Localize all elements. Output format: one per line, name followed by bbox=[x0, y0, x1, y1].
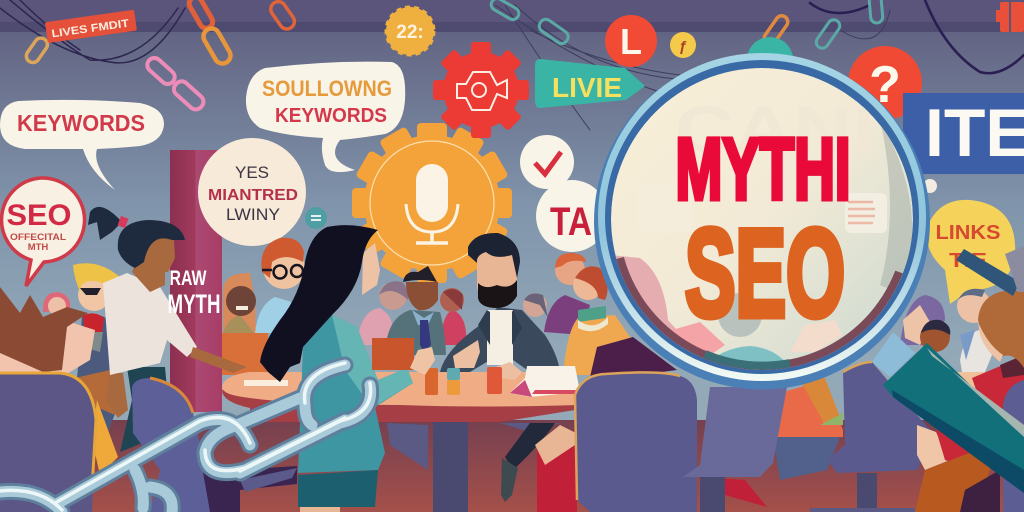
person: man in blue suit bbox=[385, 266, 446, 355]
person: woman with brown hair foreground bbox=[0, 287, 95, 378]
magnifying glass bbox=[594, 53, 1024, 493]
bubble: TA bbox=[536, 180, 608, 252]
table with pedestal bbox=[222, 372, 578, 512]
small red tag top right bbox=[996, 2, 1024, 32]
grey box top right bbox=[1005, 246, 1024, 292]
bubble: yes maintained: YES bbox=[235, 163, 269, 182]
bubble: yes maintained bbox=[198, 138, 306, 246]
speech bubble: SEO official myth: MTH bbox=[28, 242, 48, 253]
table items: cups and notebook bbox=[244, 366, 580, 397]
person: woman with long black hair bbox=[260, 225, 435, 512]
lens title: MYTHI: MYTHI bbox=[676, 121, 850, 218]
lens handle accessory bbox=[956, 249, 1020, 296]
speech bubble: swallowing keywords: SOULLOWNG bbox=[262, 76, 392, 101]
badge: 22 gear bbox=[386, 7, 434, 55]
far table and right side crowd bbox=[773, 289, 1024, 480]
bubble: links: TIE bbox=[949, 250, 987, 272]
badge: L: L bbox=[620, 21, 642, 62]
bubble: yes maintained: MIANTRED bbox=[208, 187, 298, 204]
tag: lives find it: LIVES FMDIT bbox=[51, 18, 130, 40]
small sticker bbox=[923, 179, 937, 193]
bubble: TA: TA bbox=[550, 200, 592, 244]
bubble: links: LINKS bbox=[936, 222, 1000, 244]
person: woman in ponytail bbox=[88, 207, 247, 452]
speech bubble: swallowing keywords bbox=[246, 62, 405, 172]
badge: question mark: ? bbox=[869, 56, 901, 114]
person: man with beard bbox=[440, 233, 560, 502]
red pillar bbox=[170, 150, 222, 412]
bubble: links bbox=[927, 200, 1015, 304]
speech bubble: keywords bbox=[0, 100, 164, 190]
badge: L bbox=[605, 15, 657, 67]
label: raw myth bbox=[168, 267, 220, 319]
bubble: check mark bbox=[520, 135, 574, 189]
speech bubble: SEO official myth: SEO bbox=[6, 199, 72, 232]
label: raw myth: MYTH bbox=[168, 289, 220, 319]
badge: question mark bbox=[848, 46, 922, 120]
silver chain bbox=[0, 363, 371, 512]
badge: small yellow: ƒ bbox=[679, 38, 687, 55]
tag: live bbox=[535, 59, 645, 108]
lens content: CANI bbox=[675, 92, 875, 166]
lens title: SEO: SEO bbox=[685, 205, 845, 343]
magnifier handle bbox=[872, 332, 1024, 493]
background crowd bbox=[43, 238, 590, 460]
icon: orange gear with microphone bbox=[352, 123, 512, 283]
speech bubble: SEO official myth bbox=[2, 178, 85, 286]
icon: red gear with engine bbox=[433, 42, 529, 138]
tag: lives find it bbox=[45, 10, 137, 43]
hanging chains and wires bbox=[0, 0, 1024, 130]
badge: 22 gear: 22: bbox=[396, 22, 424, 43]
magnifier ring bbox=[594, 53, 930, 390]
badge: small yellow bbox=[670, 32, 696, 58]
person: woman in orange bbox=[563, 266, 632, 375]
icon: small teal badge bbox=[305, 207, 327, 229]
lens content bbox=[600, 68, 920, 375]
tag: live: LIVIE bbox=[552, 72, 622, 103]
label: raw myth: RAW bbox=[170, 267, 207, 290]
speech bubble: swallowing keywords: KEYWORDS bbox=[275, 104, 387, 127]
speech bubble: SEO official myth: OFFECITAL bbox=[10, 232, 66, 243]
bubble: yes maintained: LWINY bbox=[226, 205, 280, 224]
teal dome behind magnifier bbox=[747, 37, 793, 56]
office chairs bbox=[0, 337, 1024, 512]
speech bubble: keywords: KEYWORDS bbox=[17, 110, 145, 136]
